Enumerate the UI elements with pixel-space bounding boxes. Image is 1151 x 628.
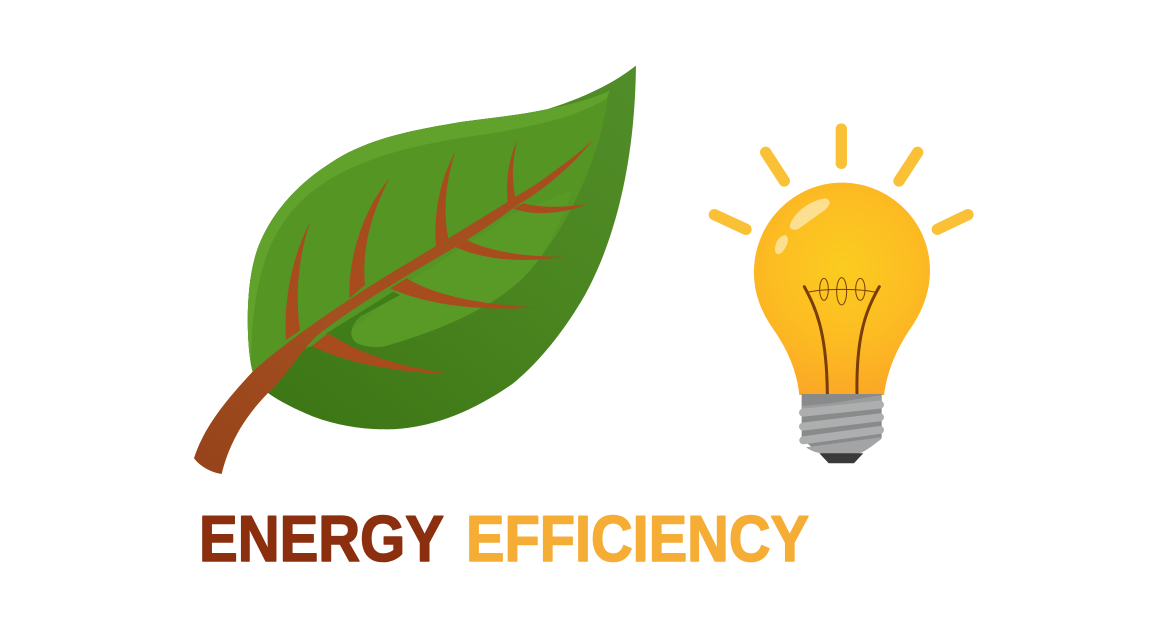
screw base xyxy=(802,394,882,463)
side veins lower xyxy=(312,333,455,374)
word: energy: ENERGY xyxy=(199,502,444,575)
filament xyxy=(804,278,879,393)
leaf lower middle panel xyxy=(351,190,573,347)
upper leaf light area xyxy=(248,92,608,372)
base contact tip xyxy=(819,453,863,463)
glass bulb xyxy=(754,183,930,395)
icon: light bulb xyxy=(714,129,968,463)
leaf blade xyxy=(248,66,636,429)
title: energy efficiency xyxy=(199,502,809,575)
side veins upper xyxy=(286,223,310,340)
light rays xyxy=(714,129,968,229)
leaf dark vein shadow xyxy=(323,292,400,348)
word: efficiency: EFFICIENCY xyxy=(466,502,809,575)
glass highlights xyxy=(775,198,830,254)
icon: green leaf xyxy=(194,66,636,474)
stem and midrib xyxy=(194,138,594,474)
leaf rim highlight xyxy=(248,91,610,365)
